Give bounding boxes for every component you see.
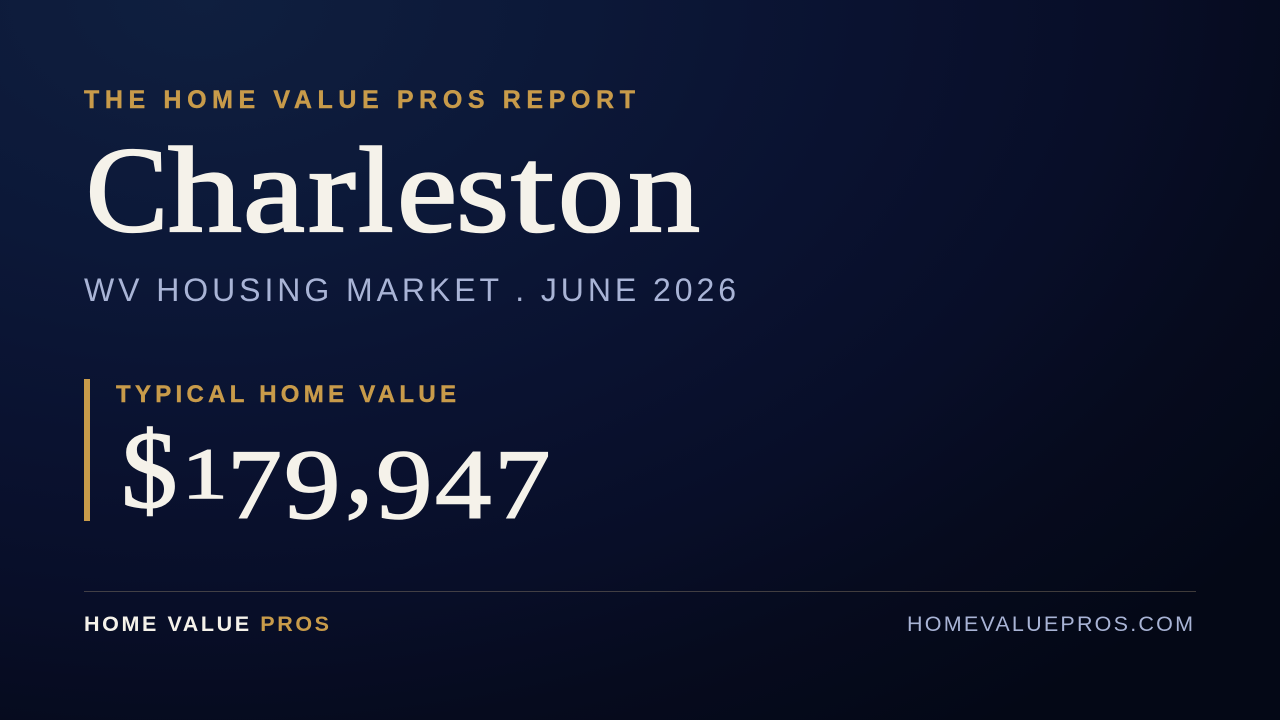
title: city name: r (308, 123, 356, 258)
title: city name: l (358, 123, 394, 258)
title: city name: n (628, 123, 700, 258)
accent bar (84, 379, 90, 521)
value figure: , (345, 400, 374, 527)
title: city name: h (168, 123, 242, 258)
title: city name: s (456, 123, 509, 258)
value figure (121, 400, 550, 540)
value figure: 1 (182, 434, 228, 514)
subtitle: WV HOUSING MARKET . JUNE 2026 (84, 272, 736, 308)
title: city name: C (86, 123, 168, 258)
eyebrow heading: THE HOME VALUE PROS REPORT (84, 86, 635, 114)
value figure: 7 (494, 429, 550, 540)
title: city name: o (558, 123, 624, 258)
value figure: $ (121, 409, 178, 531)
title: city name: a (243, 123, 305, 258)
value figure: 9 (284, 429, 340, 540)
footer brand: HOME VALUE PROS (84, 612, 329, 636)
value figure: 7 (227, 429, 282, 540)
footer divider (84, 591, 1196, 592)
value figure: 9 (376, 429, 432, 540)
title: city name: e (397, 123, 457, 258)
title: city name: t (511, 123, 554, 258)
footer url: HOMEVALUEPROS.COM (907, 612, 1193, 636)
value label: TYPICAL HOME VALUE (116, 381, 456, 408)
title: city name (86, 123, 700, 258)
value figure: 4 (435, 429, 492, 540)
